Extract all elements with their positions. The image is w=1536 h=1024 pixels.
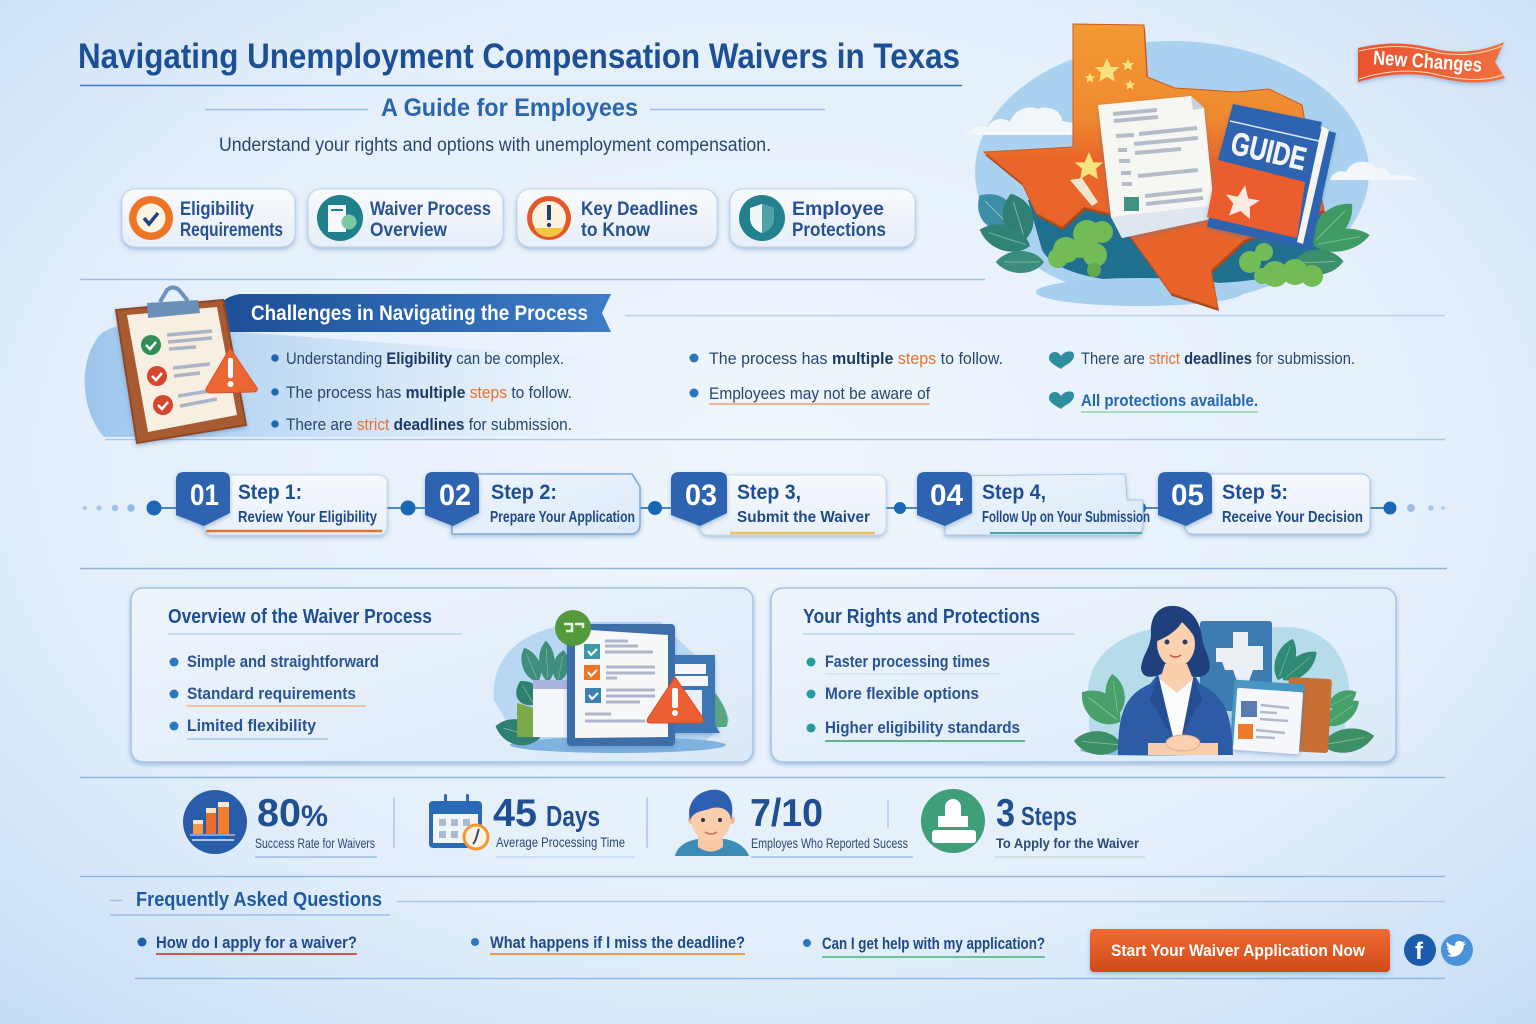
- rights list: Faster processing times: [825, 653, 990, 671]
- challenges list: column one: There are strict deadlines for submission.: [286, 415, 572, 434]
- sky blob: [975, 41, 1369, 303]
- pill: key deadlines: to Know: [581, 220, 650, 241]
- title: Navigating Unemployment Compensation Waivers in Texas: [78, 36, 960, 76]
- step 3: Step 3,: [737, 481, 801, 504]
- FAQ heading: Frequently Asked Questions: [136, 889, 382, 911]
- foliage base: [1028, 200, 1332, 284]
- leaves right: [1293, 195, 1372, 276]
- step 5: 05: [1171, 479, 1204, 512]
- call-to-action button: Start Your Waiver Application Now: [1111, 942, 1365, 960]
- timeline connectors: [83, 500, 1445, 516]
- intro text: Understand your rights and options with unemployment compensation.: [219, 135, 771, 156]
- question 2: What happens if I miss the deadline?: [490, 934, 745, 952]
- banner heading: [222, 294, 611, 332]
- panel: overview of the waiver process: [131, 588, 753, 762]
- Texas map shadow: [985, 27, 1325, 311]
- step 5: [1158, 472, 1370, 534]
- leaves left: [968, 184, 1044, 273]
- banner heading: Challenges in Navigating the Process: [251, 302, 588, 325]
- stat: 7/10 employees: Employes Who Reported Sucess: [751, 835, 908, 851]
- icon: twitter: [1441, 934, 1473, 966]
- subtitle: A Guide for Employees: [381, 94, 638, 122]
- pill: waiver process overview: [308, 189, 503, 247]
- stat: 80% success rate: [183, 790, 377, 857]
- stat: 80% success rate: 80%: [257, 792, 328, 835]
- challenges list: column one: [271, 349, 572, 434]
- panel: your rights and protections: [771, 588, 1396, 762]
- hero illustration: Texas map with document and guide book: [968, 24, 1418, 311]
- step 2: 02: [439, 479, 471, 512]
- step 3: [671, 472, 886, 535]
- guide book: [1207, 104, 1336, 250]
- process list: Limited flexibility: [187, 717, 317, 735]
- illustration: checklist with warning: [492, 610, 730, 753]
- steps timeline: [83, 472, 1445, 535]
- challenges list: column two: Employees may not be aware of: [709, 384, 930, 403]
- stat: 3 steps: Steps: [1021, 801, 1077, 831]
- rights list: More flexible options: [825, 685, 979, 703]
- pill: eligibility requirements: [122, 189, 295, 247]
- step 3: 03: [685, 479, 717, 512]
- pill: key deadlines: [517, 189, 717, 247]
- challenges list: column one: The process has multiple steps to follow.: [286, 383, 572, 402]
- stat: 45 days: [429, 792, 635, 857]
- pill: employee protections: Protections: [792, 220, 886, 241]
- step 4: [917, 472, 1150, 535]
- icon: facebook: [1404, 934, 1436, 966]
- FAQ section: [110, 889, 1473, 972]
- step 4: Follow Up on Your Submission: [982, 509, 1150, 526]
- step 1: Review Your Eligibility: [238, 509, 377, 526]
- step 1: 01: [190, 479, 219, 512]
- panel heading: Your Rights and Protections: [803, 606, 1040, 628]
- panel: challenges: [85, 288, 1355, 443]
- step 2: [425, 472, 640, 534]
- pill: employee protections: [730, 189, 915, 247]
- pill: key deadlines: Key Deadlines: [581, 199, 698, 220]
- stat: 3 steps: 3: [996, 792, 1015, 835]
- step 2: Step 2:: [491, 481, 557, 504]
- step 3: Submit the Waiver: [737, 509, 870, 526]
- blob behind clipboard: [85, 323, 620, 437]
- call-to-action button: [1090, 929, 1390, 972]
- process list: Standard requirements: [187, 685, 356, 703]
- step 1: Step 1:: [238, 481, 302, 504]
- document: [1098, 96, 1216, 238]
- torn seam detail: [1070, 178, 1098, 206]
- stat: 3 steps: [921, 789, 1145, 857]
- challenges list: column three: There are strict deadlines for submission.: [1081, 349, 1355, 368]
- stat: 7/10 employees: 7/10: [750, 792, 823, 835]
- illustration: woman with documents: [1073, 606, 1376, 757]
- icon: clipboard with warning: [116, 288, 257, 443]
- new changes ribbon: New Changes: [1372, 47, 1483, 77]
- shrubs: [1048, 220, 1323, 287]
- challenges list: column two: [690, 349, 1003, 404]
- guide book: GUIDE: [1228, 125, 1310, 177]
- rights list: Higher eligibility standards: [825, 719, 1020, 737]
- question 3: [803, 935, 1045, 957]
- stat: 80% success rate: Success Rate for Waivers: [255, 835, 375, 851]
- question 3: Can I get help with my application?: [822, 935, 1045, 953]
- topic pills: [122, 189, 915, 247]
- pill: employee protections: Employee: [792, 199, 884, 220]
- panel heading: Overview of the Waiver Process: [168, 606, 432, 628]
- stat: 45 days: 45: [493, 792, 537, 835]
- challenges list: column two: The process has multiple steps to follow.: [709, 349, 1003, 368]
- challenges list: column three: All protections available.: [1081, 391, 1258, 410]
- clouds: [968, 107, 1074, 135]
- pill: waiver process overview: Waiver Process: [370, 199, 491, 220]
- rights list: [806, 653, 1025, 741]
- challenges list: column three: [1049, 349, 1355, 412]
- process list: Simple and straightforward: [187, 653, 379, 671]
- Texas map: [984, 24, 1324, 308]
- stars: [1075, 58, 1135, 179]
- step 1: [176, 472, 387, 535]
- step 4: Step 4,: [982, 481, 1046, 504]
- stat: 3 steps: To Apply for the Waiver: [996, 835, 1140, 851]
- question 1: How do I apply for a waiver?: [156, 934, 357, 952]
- step 5: Step 5:: [1222, 481, 1288, 504]
- pill: eligibility requirements: Requirements: [180, 220, 283, 241]
- stat: 45 days: Days: [546, 801, 600, 833]
- stat: 7/10 employees: [675, 790, 913, 857]
- step 5: Receive Your Decision: [1222, 509, 1363, 526]
- new changes ribbon: [1358, 42, 1505, 82]
- stat: 45 days: Average Processing Time: [496, 834, 625, 850]
- step 2: Prepare Your Application: [490, 509, 635, 526]
- statistics row: [183, 789, 1145, 857]
- pill: waiver process overview: Overview: [370, 220, 447, 241]
- step 4: 04: [930, 479, 963, 512]
- pill: eligibility requirements: Eligibility: [180, 199, 254, 220]
- challenges list: column one: Understanding Eligibility can be complex.: [286, 349, 564, 368]
- process list: [170, 653, 379, 739]
- icon: facebook: f: [1415, 938, 1424, 965]
